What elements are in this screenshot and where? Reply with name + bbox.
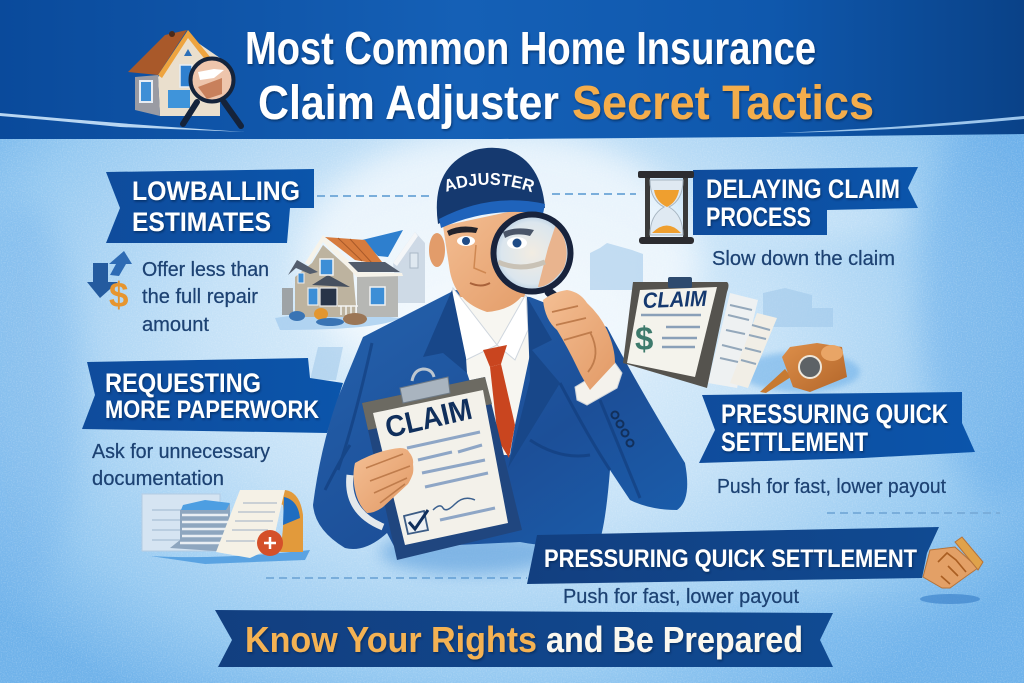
text: paperwork description bbox=[92, 441, 270, 490]
heading: delaying claim process: DELAYING CLAIM bbox=[706, 174, 900, 204]
debris bbox=[289, 311, 305, 321]
orange roof bbox=[325, 237, 382, 263]
ribbon: requesting bbox=[82, 358, 343, 433]
panel: delaying claim process bbox=[638, 167, 918, 270]
shirt bbox=[450, 297, 533, 455]
title: Secret Tactics bbox=[572, 77, 874, 130]
shadow below figure bbox=[380, 530, 560, 574]
text: lowballing description bbox=[142, 259, 269, 336]
faded background buildings bbox=[310, 243, 833, 380]
dark roof bbox=[348, 262, 400, 272]
title bbox=[245, 22, 874, 130]
right hand and cuff bbox=[543, 290, 622, 405]
cap: ADJUSTER bbox=[446, 172, 534, 192]
tie bbox=[483, 345, 515, 458]
neck bbox=[456, 270, 526, 342]
icon: hourglass bbox=[638, 171, 694, 244]
heading: lowballing estimates: LOWBALLING bbox=[132, 176, 300, 206]
faded right gable bbox=[393, 232, 425, 303]
header band bbox=[0, 0, 1024, 139]
heading: delaying claim process bbox=[706, 174, 900, 232]
text: lowballing description: the full repair bbox=[142, 286, 258, 308]
text: paperwork description: Ask for unnecessary bbox=[92, 441, 270, 463]
text: delaying description: Slow down the claim bbox=[712, 248, 895, 270]
icon: handshake bbox=[920, 537, 983, 604]
clipboard: CLAIM bbox=[382, 393, 475, 445]
porch rail bbox=[338, 306, 358, 315]
ground bbox=[275, 314, 400, 330]
heading: lowballing estimates: ESTIMATES bbox=[132, 207, 271, 237]
suit jacket bbox=[313, 290, 687, 549]
connector dashes bbox=[266, 194, 1000, 578]
text: pressuring description: Push for fast, lower payout bbox=[717, 476, 946, 498]
house front bbox=[158, 36, 220, 116]
banner: know your rights bbox=[215, 610, 833, 667]
ribbon: delaying bbox=[693, 167, 918, 235]
heading: pressuring bottom: PRESSURING QUICK SETTLEMENT bbox=[544, 545, 917, 573]
heading: requesting more paperwork bbox=[105, 368, 319, 424]
title: Claim Adjuster bbox=[258, 77, 559, 130]
heading: pressuring quick settlement bbox=[721, 399, 948, 457]
face bbox=[429, 205, 545, 312]
house roof bbox=[128, 30, 187, 75]
blue back roof bbox=[362, 230, 403, 257]
ribbon: pressuring bottom bbox=[527, 527, 939, 584]
text: paperwork description: documentation bbox=[92, 468, 224, 490]
illustration: claim clipboard with papers and gavel: CLAIM bbox=[642, 286, 708, 313]
text: lowballing description: amount bbox=[142, 314, 209, 336]
panel: requesting more paperwork bbox=[82, 358, 343, 564]
ribbon: lowballing bbox=[106, 169, 314, 243]
collars bbox=[450, 288, 528, 360]
magnifier bbox=[183, 102, 197, 124]
header icon: house under magnifier bbox=[128, 30, 241, 126]
suit folds bbox=[325, 343, 640, 498]
heading: requesting more paperwork: MORE PAPERWORK bbox=[105, 396, 319, 424]
text: lowballing description: Offer less than bbox=[142, 259, 269, 281]
illustration: damaged house bbox=[275, 230, 425, 330]
illustration: adjuster bbox=[313, 148, 688, 583]
panel: lowballing estimates bbox=[87, 169, 314, 336]
illustration: claim clipboard with papers and gavel: $ bbox=[635, 320, 653, 357]
heading: delaying claim process: PROCESS bbox=[706, 202, 811, 232]
banner: know your rights: Know Your Rights bbox=[245, 619, 537, 660]
heading: lowballing estimates bbox=[132, 176, 300, 237]
clipboard bbox=[362, 369, 522, 560]
magnifying glass bbox=[494, 214, 570, 301]
heading: pressuring quick settlement: PRESSURING QUICK bbox=[721, 399, 948, 429]
icon: arrows and dollar bbox=[87, 251, 132, 315]
lapels bbox=[423, 290, 560, 468]
heading: pressuring quick settlement: SETTLEMENT bbox=[721, 427, 868, 457]
sleeve buttons bbox=[612, 412, 634, 446]
ribbon: pressuring right bbox=[699, 392, 975, 463]
heading: requesting more paperwork: REQUESTING bbox=[105, 368, 261, 398]
windows and door bbox=[320, 259, 333, 275]
panel: pressuring quick settlement right bbox=[699, 392, 975, 498]
text: pressuring bottom description: Push for fast, lower payout bbox=[563, 586, 799, 608]
panel: pressuring quick settlement bottom bbox=[527, 527, 983, 608]
banner: know your rights: and Be Prepared bbox=[546, 619, 803, 660]
main gable trim bbox=[305, 235, 403, 277]
icon: paperwork stack bbox=[142, 490, 310, 564]
left hand bbox=[354, 448, 413, 513]
cap bbox=[436, 148, 545, 228]
illustration: claim clipboard with papers and gavel bbox=[623, 277, 860, 393]
icon: arrows and dollar: $ bbox=[109, 276, 128, 315]
walls bbox=[282, 288, 293, 315]
left cuff bbox=[350, 475, 383, 527]
title: Most Common Home Insurance bbox=[245, 22, 816, 74]
